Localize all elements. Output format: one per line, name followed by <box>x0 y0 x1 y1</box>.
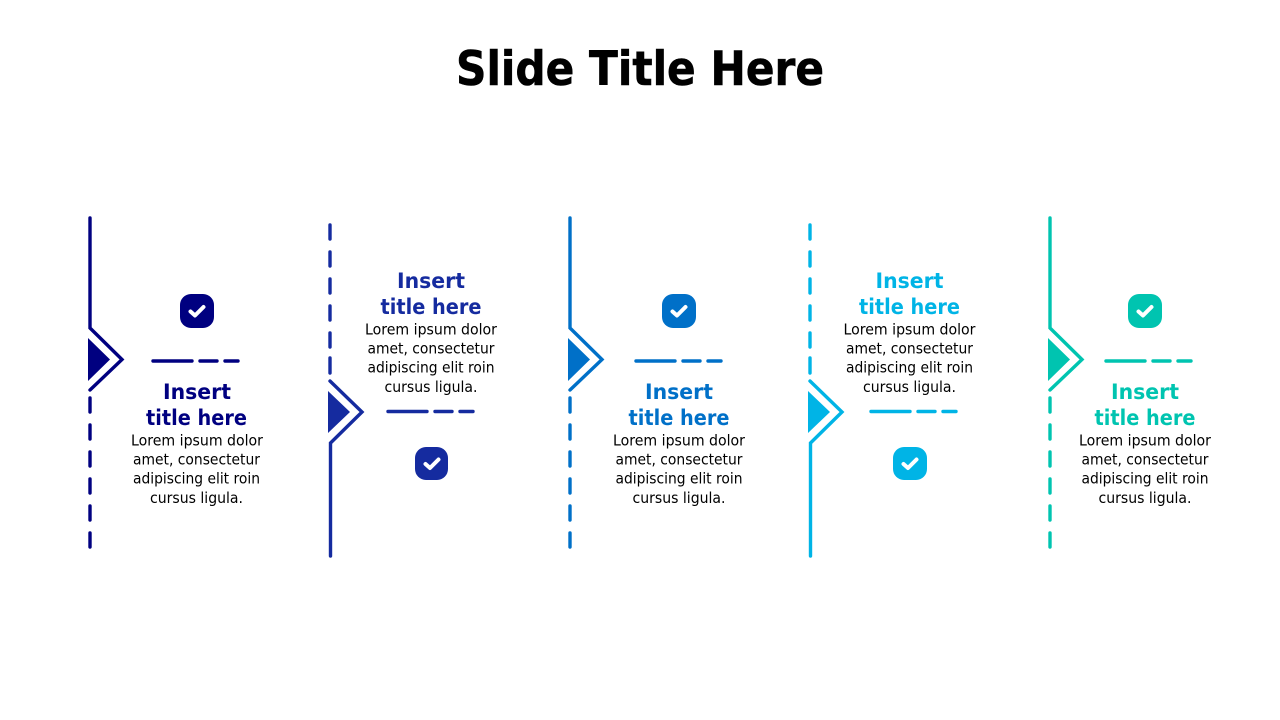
text block 3: adipiscing elit roin <box>616 470 742 488</box>
text block 2: cursus ligula. <box>384 378 478 396</box>
timeline marker 5 <box>1050 218 1082 547</box>
heading 1: Insert <box>163 380 231 405</box>
text block 5: Lorem ipsum dolor <box>1079 432 1212 450</box>
arrow 4 <box>808 391 830 433</box>
text block 3: amet, consectetur <box>616 450 743 468</box>
arrow 1 <box>88 338 110 381</box>
divider 2 <box>388 410 473 413</box>
text block 1 <box>131 432 264 507</box>
timeline marker 4 <box>810 225 842 556</box>
icon: check 3 <box>662 294 696 328</box>
icon: check 4 <box>893 447 927 480</box>
heading 5: Insert <box>1111 380 1179 405</box>
icon: check 2 <box>415 447 448 480</box>
text block 2: amet, consectetur <box>368 340 495 358</box>
divider 3 <box>636 359 721 363</box>
text block 1: amet, consectetur <box>133 450 261 468</box>
text block 1: cursus ligula. <box>150 489 243 507</box>
arrow 3 <box>568 338 590 381</box>
title: Slide Title Here <box>456 42 824 97</box>
heading 5: title here <box>1094 406 1196 431</box>
heading 1: title here <box>146 406 247 431</box>
panel: step 1 <box>88 218 264 547</box>
panel: step 5 <box>1048 218 1212 547</box>
divider 5 <box>1106 359 1191 363</box>
text block 2: Lorem ipsum dolor <box>365 320 498 338</box>
text block 3: Lorem ipsum dolor <box>613 432 746 450</box>
icon: check 1 <box>180 294 214 328</box>
arrow 5 <box>1048 338 1070 381</box>
text block 5: adipiscing elit roin <box>1082 470 1208 488</box>
panel: step 3 <box>568 218 746 547</box>
heading 1 <box>146 380 247 431</box>
text block 4 <box>844 320 976 396</box>
text block 1: adipiscing elit roin <box>133 470 260 488</box>
arrow 2 <box>328 391 350 433</box>
timeline marker 3 <box>570 218 602 547</box>
text block 2: adipiscing elit roin <box>368 358 494 376</box>
text block 3: cursus ligula. <box>632 489 726 507</box>
text block 4: cursus ligula. <box>863 378 956 396</box>
text block 3 <box>613 432 746 507</box>
text block 4: amet, consectetur <box>846 340 974 358</box>
text block 5 <box>1079 432 1212 507</box>
panel: step 2 <box>328 225 498 556</box>
text block 5: cursus ligula. <box>1098 489 1192 507</box>
text block 5: amet, consectetur <box>1082 450 1209 468</box>
icon: check 5 <box>1128 294 1162 328</box>
text block 4: Lorem ipsum dolor <box>844 320 976 338</box>
heading 5 <box>1094 380 1196 431</box>
heading 2 <box>380 269 482 320</box>
heading 4: title here <box>859 295 960 320</box>
panel: step 4 <box>808 225 976 556</box>
heading 3: title here <box>628 406 730 431</box>
text block 1: Lorem ipsum dolor <box>131 432 264 450</box>
text block 4: adipiscing elit roin <box>846 358 973 376</box>
text block 2 <box>365 320 498 396</box>
heading 3 <box>628 380 730 431</box>
heading 4: Insert <box>876 269 944 294</box>
timeline marker 2 <box>330 225 362 556</box>
timeline marker 1 <box>90 218 122 547</box>
heading 3: Insert <box>645 380 713 405</box>
heading 4 <box>859 269 960 320</box>
divider 1 <box>153 359 238 363</box>
heading 2: Insert <box>397 269 465 294</box>
divider 4 <box>871 410 956 413</box>
heading 2: title here <box>380 295 482 320</box>
